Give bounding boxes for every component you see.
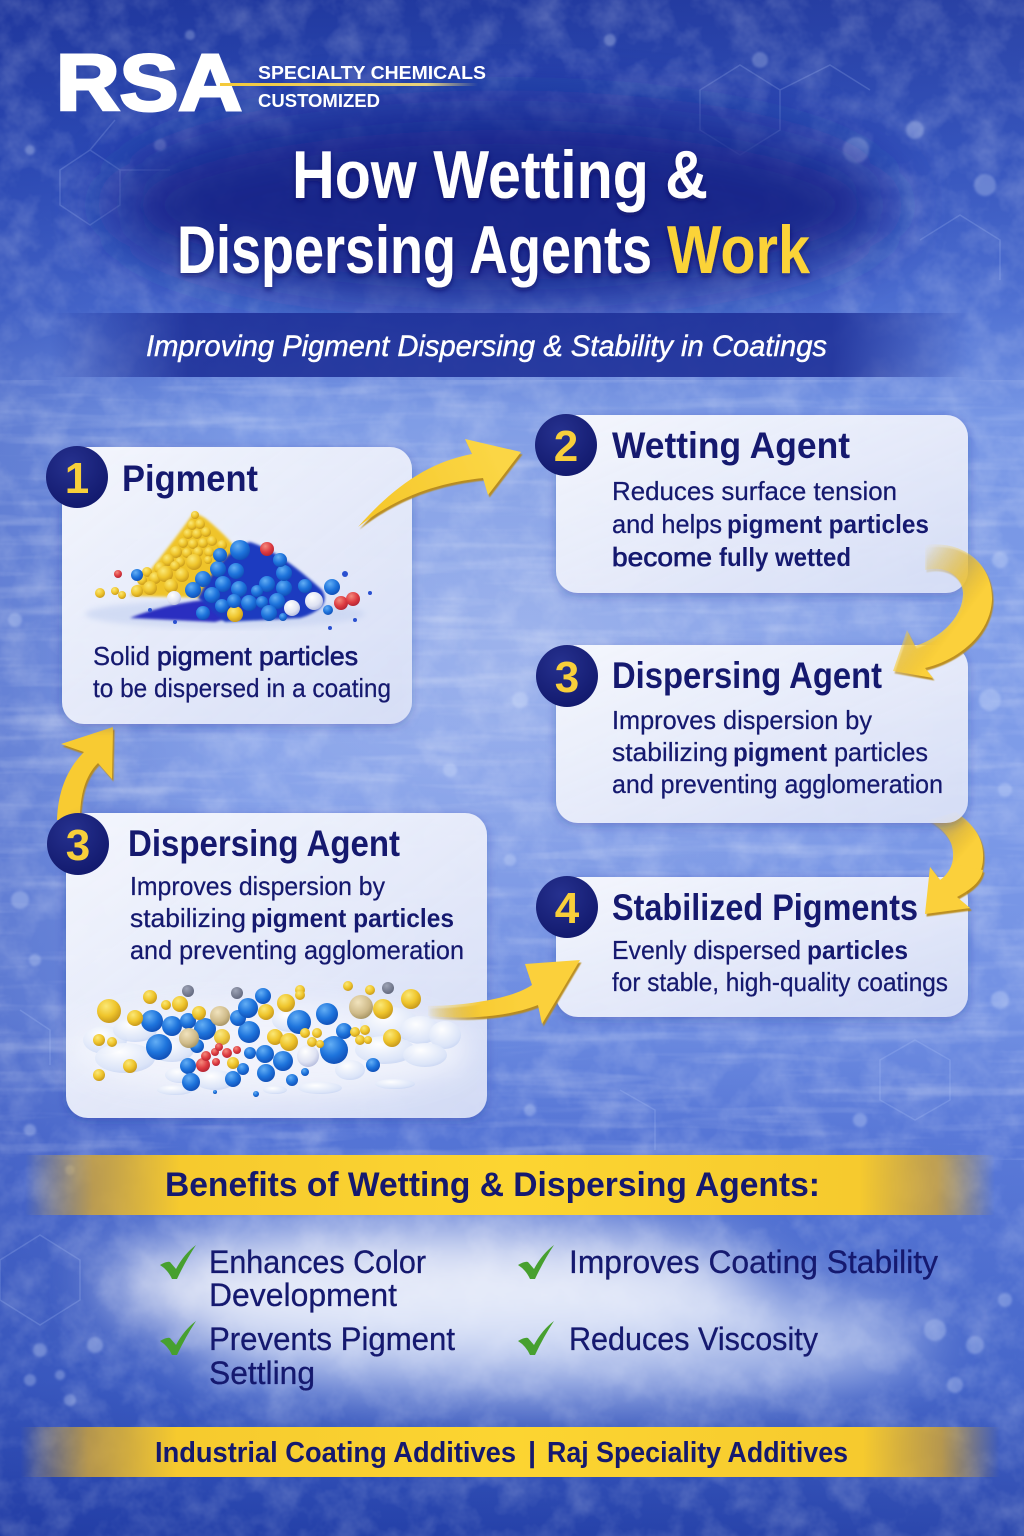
illustration: pigment pile — [85, 511, 372, 630]
badge 2 — [535, 414, 597, 476]
benefit: prevents pigment settling — [160, 1321, 455, 1391]
badge 1 — [46, 446, 108, 508]
check icon — [160, 1321, 196, 1355]
pigment caption: pigment particles — [157, 641, 358, 671]
panel: dispersing agent right — [536, 645, 968, 823]
card: stabilized pigments — [556, 877, 968, 1017]
wetting agent description: pigment particles — [727, 509, 929, 539]
heading: stabilized pigments: Stabilized Pigments — [612, 887, 918, 928]
pigment caption — [93, 641, 391, 703]
panel: dispersing agent left — [47, 813, 487, 1118]
benefit: reduces viscosity: Reduces Viscosity — [569, 1321, 818, 1357]
badge 4 — [536, 876, 598, 938]
pigment caption: Solid — [93, 641, 150, 671]
benefit: improves coating stability: Improves Coating Stability — [569, 1244, 938, 1280]
dispersing agent description left: pigment particles — [251, 903, 454, 933]
wetting agent description — [612, 476, 929, 572]
title dark halo — [110, 110, 890, 300]
benefit: enhances color development: Enhances Color — [209, 1244, 426, 1280]
footer band: Raj Speciality Additives — [547, 1437, 848, 1469]
wetting agent description: become — [612, 542, 712, 572]
dispersing agent description right: Improves dispersion by — [612, 705, 872, 735]
dispersing agent description right: pigment — [733, 737, 827, 767]
dispersing agent description left: stabilizing — [130, 903, 246, 933]
footer band — [20, 1427, 1000, 1477]
card: wetting agent — [556, 415, 968, 593]
stabilized pigments description: particles — [807, 935, 908, 965]
heading: dispersing agent left: Dispersing Agent — [128, 823, 400, 864]
check icon — [160, 1245, 196, 1279]
card: dispersing agent left — [66, 813, 487, 1118]
footer band: | — [528, 1437, 536, 1469]
badge 2: 2 — [554, 422, 578, 471]
heading: pigment: Pigment — [122, 458, 258, 499]
title: Dispersing Agents — [177, 212, 652, 288]
illustration: dispersed particles — [70, 981, 470, 1097]
dispersing agent description left: and preventing agglomeration — [130, 935, 464, 965]
stabilized pigments description: for stable, high-quality coatings — [612, 967, 948, 997]
logo: RSA — [56, 38, 242, 127]
title — [177, 137, 810, 288]
logo: SPECIALTY CHEMICALS — [258, 63, 486, 83]
card: dispersing agent right — [556, 645, 968, 823]
stabilized pigments description — [612, 935, 948, 997]
arrow: pigment to wetting agent — [358, 439, 521, 527]
heading: dispersing agent right: Dispersing Agent — [612, 655, 882, 696]
benefit: prevents pigment settling: Prevents Pigment — [209, 1321, 455, 1357]
benefit: prevents pigment settling: Settling — [209, 1355, 315, 1391]
wetting agent description: and helps — [612, 509, 722, 539]
logo: CUSTOMIZED — [258, 91, 380, 111]
panel: stabilized pigments — [536, 876, 968, 1017]
benefits heading band — [25, 1155, 995, 1215]
arrow: wetting agent to dispersing agent — [893, 544, 992, 678]
title: How Wetting & — [292, 137, 708, 213]
arrow: dispersing agent up to pigment — [57, 727, 113, 820]
badge 3 right: 3 — [555, 653, 579, 702]
heading: wetting agent: Wetting Agent — [612, 425, 850, 466]
subtitle band: Improving Pigment Dispersing & Stability in Coatings — [146, 330, 827, 363]
check icon — [518, 1245, 554, 1279]
dispersing agent description right — [612, 705, 943, 799]
panel: wetting agent — [535, 414, 968, 593]
dispersing agent description left: Improves dispersion by — [130, 871, 385, 901]
badge 4: 4 — [555, 884, 580, 933]
wetting agent description: Reduces surface tension — [612, 476, 897, 506]
logo — [56, 38, 486, 127]
badge 3 right — [536, 645, 598, 707]
badge 3 left: 3 — [66, 821, 90, 870]
card: pigment — [62, 447, 412, 724]
benefit: enhances color development: Development — [209, 1277, 397, 1313]
benefits heading band: Benefits of Wetting & Dispersing Agents: — [165, 1166, 820, 1204]
badge 1: 1 — [65, 454, 89, 503]
benefits glow panel — [100, 1223, 930, 1398]
dispersing agent description left — [130, 871, 464, 965]
panel: pigment — [46, 446, 412, 724]
title: Work — [667, 212, 810, 288]
dispersing agent description right: particles — [834, 737, 928, 767]
pigment caption: to be dispersed in a coating — [93, 673, 391, 703]
dispersing agent description right: stabilizing — [612, 737, 728, 767]
arrow head overlay: dispersing to stabilized — [925, 864, 983, 914]
dispersing agent description right: and preventing agglomeration — [612, 769, 943, 799]
wetting agent description: fully wetted — [719, 542, 851, 572]
benefit: enhances color development — [160, 1244, 426, 1313]
stabilized pigments description: Evenly dispersed — [612, 935, 801, 965]
check icon — [518, 1321, 554, 1355]
arrow: dispersed particles to stabilized pigments — [428, 960, 580, 1024]
footer band: Industrial Coating Additives — [155, 1437, 516, 1469]
subtitle band — [50, 313, 970, 377]
badge 3 left — [47, 813, 109, 875]
arrow: dispersing agent to stabilized pigments — [925, 812, 983, 914]
